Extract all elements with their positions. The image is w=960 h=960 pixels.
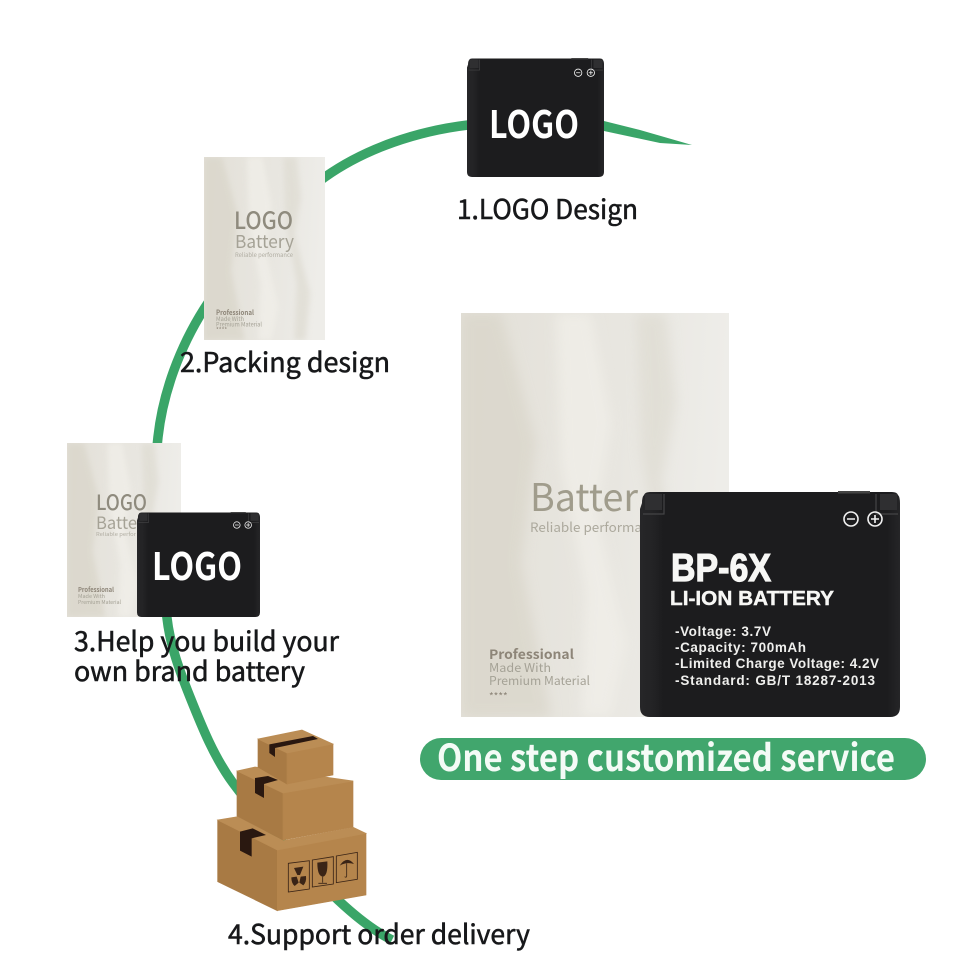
step 4: stacked cardboard boxes	[218, 730, 366, 911]
green circular path	[155, 121, 692, 940]
large product: retail box: ****	[489, 688, 508, 703]
large product: BP-6X battery: BP-6X	[671, 547, 771, 590]
large product: BP-6X battery: -Standard: GB/T 18287-2013	[675, 673, 875, 688]
large product: retail box: Professional	[489, 644, 574, 663]
banner: one step customized service: One step customized service	[437, 728, 895, 782]
step 3: box with battery: Professional	[78, 584, 114, 594]
step 3 label: own brand battery	[74, 650, 305, 689]
step 1: logo battery	[467, 58, 604, 177]
step 3: box with battery: LOGO	[152, 536, 242, 591]
step 1: logo battery: LOGO	[489, 94, 579, 149]
large product: retail box: Reliable performa	[530, 517, 642, 536]
large product: retail box: Premium Material	[489, 672, 590, 689]
large product: retail box: Made With	[489, 659, 551, 676]
step 2: packaging box: Made With	[216, 314, 244, 323]
step 2: packaging box: Professional	[216, 308, 255, 318]
large product: BP-6X battery: -Capacity: 700mAh	[675, 640, 806, 655]
step 2: packaging box: ****	[216, 325, 227, 334]
step 4 label: 4.Support order delivery	[228, 913, 530, 952]
step 2: packaging box: Premium Material	[216, 320, 262, 328]
large product: BP-6X battery: -Voltage: 3.7V	[675, 624, 771, 639]
step 3: box with battery: LOGO	[96, 487, 147, 517]
step 3: box with battery: Reliable perfor	[96, 531, 136, 538]
step 3 label: 3.Help you build your	[74, 620, 340, 659]
step 1 label: 1.LOGO Design	[457, 188, 638, 227]
step 3: box with battery	[67, 443, 260, 617]
step 2: packaging box	[204, 157, 325, 340]
step 2 label: 2.Packing design	[180, 341, 390, 380]
step 2: packaging box: Reliable performance	[235, 250, 294, 259]
large product: BP-6X battery	[640, 491, 900, 717]
step 2: packaging box: LOGO	[234, 201, 293, 236]
large product: retail box: Batter	[530, 467, 638, 522]
step 3 label	[74, 620, 340, 689]
large product: BP-6X battery: -Limited Charge Voltage: 4.2V	[675, 656, 879, 671]
step 3: box with battery: Premium Material	[78, 598, 121, 606]
step 3: box with battery: Batte	[96, 509, 137, 534]
large product: retail box	[461, 313, 729, 717]
step 3: box with battery: Made With	[78, 592, 105, 600]
step 2: packaging box: Battery	[235, 228, 295, 254]
large product: BP-6X battery: LI-ION BATTERY	[670, 588, 835, 610]
